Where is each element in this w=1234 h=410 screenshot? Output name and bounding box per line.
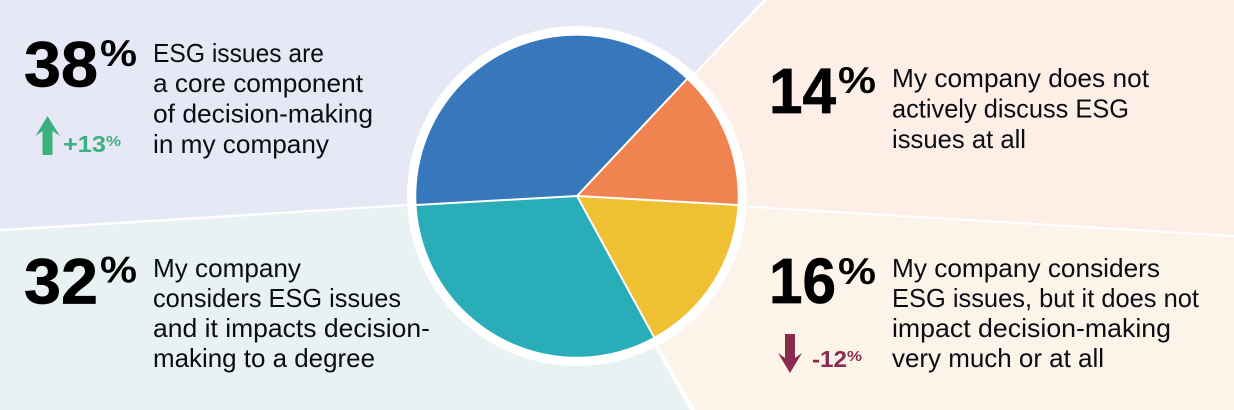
description: little impact: impact decision-making (892, 313, 1171, 343)
panel: no discussion (577, 0, 1234, 235)
panel background: teal (0, 196, 690, 410)
statistic: 14%: 14 (769, 55, 836, 127)
slice: 16% yellow (577, 196, 738, 337)
description: no discussion: issues at all (892, 124, 1026, 154)
description: no discussion: actively discuss ESG (892, 94, 1129, 124)
description: core component: of decision-making (153, 98, 373, 128)
description: no discussion (892, 63, 1150, 154)
slice: 14% orange (577, 80, 738, 205)
description: no discussion: My company does not (892, 63, 1150, 93)
change: -12% (812, 346, 862, 372)
description: impacts to a degree: My company (153, 253, 301, 283)
description: little impact: ESG issues, but it does not (892, 283, 1200, 313)
panel: core component (0, 0, 763, 229)
pie outer ring (407, 26, 747, 366)
statistic: 38%: 38 (24, 28, 98, 100)
description: impacts to a degree: considers ESG issues (153, 283, 401, 313)
description: core component: in my company (153, 129, 329, 159)
statistic: 32%: % (100, 250, 137, 290)
icon: up arrow (36, 116, 60, 155)
statistic: 14% (769, 55, 876, 127)
panel background: yellow (577, 196, 1234, 410)
description: little impact (892, 253, 1200, 373)
statistic: 32%: 32 (24, 246, 98, 318)
description: little impact: My company considers (892, 253, 1160, 283)
change: -12%: % (847, 348, 862, 365)
change: +13% (63, 131, 121, 157)
statistic: 32% (24, 246, 137, 318)
change: +13%: % (106, 133, 121, 150)
description: impacts to a degree: and it impacts decision- (153, 313, 430, 343)
panel: impacts to a degree (0, 196, 690, 410)
pie chart (407, 26, 747, 366)
slice: 32% teal (416, 196, 654, 357)
statistic: 38% (24, 28, 137, 100)
change: +13%: +13 (63, 131, 106, 157)
statistic: 16%: 16 (769, 245, 836, 317)
description: core component: a core component (153, 68, 364, 98)
statistic: 16%: % (838, 251, 876, 292)
description: core component (153, 38, 373, 159)
statistic: 38%: % (100, 33, 137, 74)
description: little impact: very much or at all (892, 343, 1104, 373)
panel: little impact (577, 196, 1234, 410)
icon: down arrow (778, 334, 802, 373)
statistic: 14%: % (838, 60, 876, 101)
change: -12%: -12 (812, 346, 847, 372)
panel background: blue (0, 0, 763, 229)
slice: 38% blue (416, 36, 687, 205)
description: impacts to a degree: making to a degree (153, 343, 375, 373)
statistic: 16% (769, 245, 876, 317)
description: impacts to a degree (153, 253, 430, 373)
panel background: orange (577, 0, 1234, 235)
description: core component: ESG issues are (153, 38, 324, 68)
